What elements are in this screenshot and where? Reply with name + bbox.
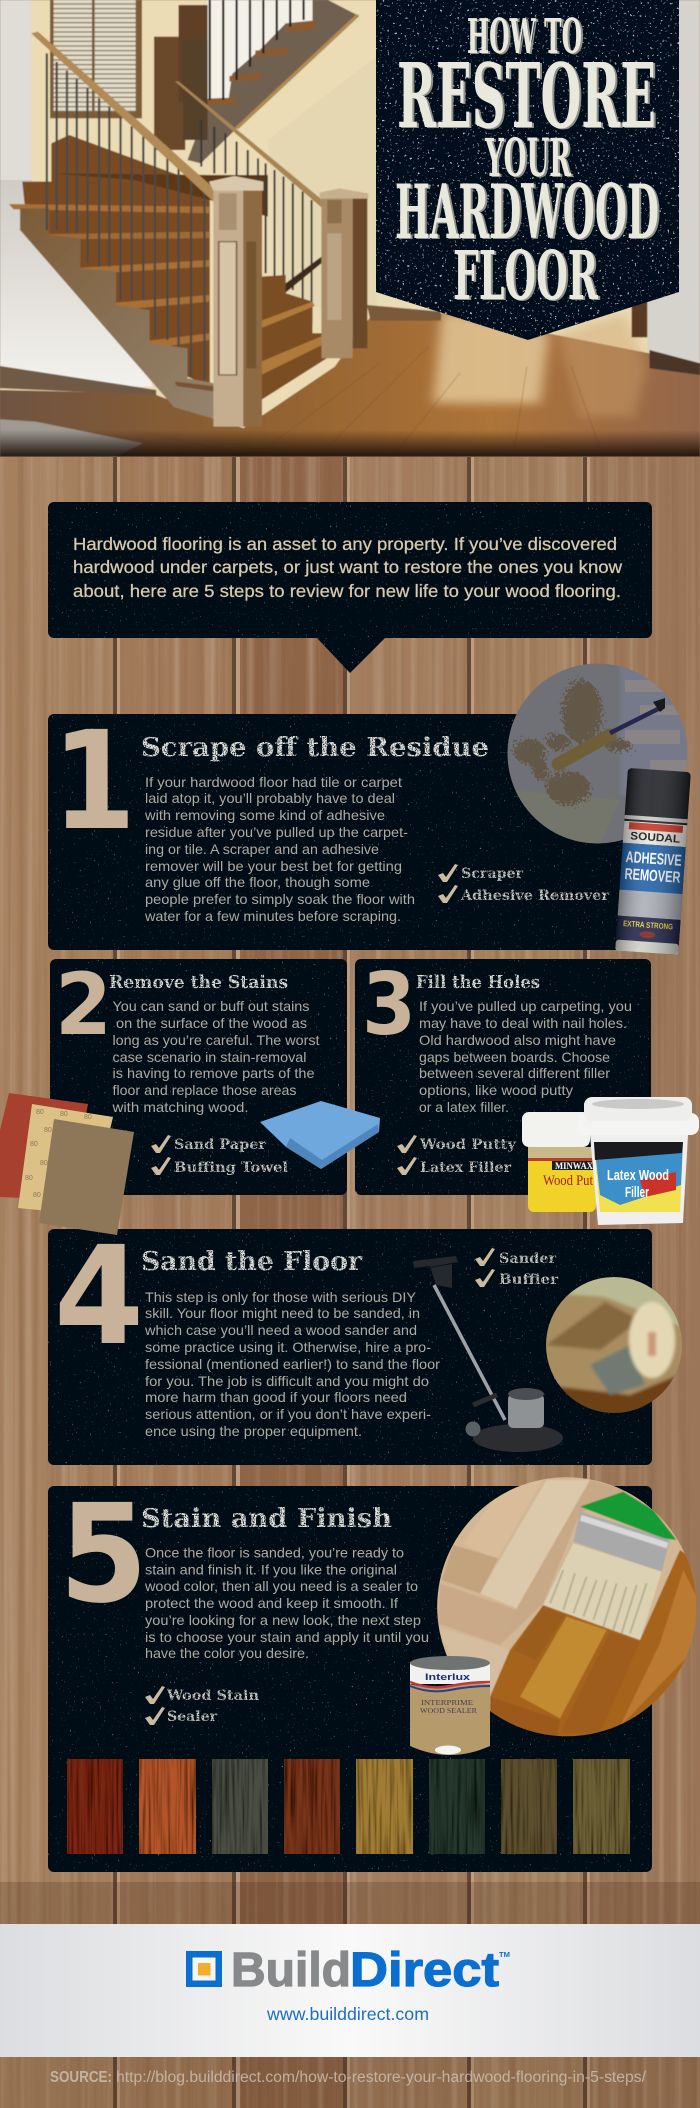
body: step 1: remover will be your best bet for getting [145, 859, 402, 874]
body: step 2: is having to remove parts of the [112, 1066, 314, 1081]
checklist: step 4: Sander [499, 1251, 557, 1267]
body: step 4: fessional (mentioned earlier!) to sand the floor [145, 1357, 440, 1372]
icon: wood sealer can [410, 1656, 490, 1755]
logo: BuildDirect: Build [231, 1944, 351, 1997]
icon: sandpaper sheets: 80 [60, 1111, 68, 1118]
body: step 3: or a latex filler. [419, 1100, 509, 1115]
icon: sandpaper sheets: 80 [33, 1192, 41, 1199]
checklist: step 5: Sealer [167, 1709, 218, 1725]
heading: step 4: Sand the Floor [141, 1247, 362, 1277]
checklist: step 3 [397, 1135, 517, 1176]
title [395, 9, 659, 315]
checklist: step 3: Wood Putty [419, 1137, 517, 1153]
heading: step 2: Remove the Stains [109, 972, 288, 993]
stain colour swatches [67, 1759, 630, 1854]
body: step 3: may have to deal with nail holes. [419, 1016, 627, 1031]
title banner [376, 0, 679, 340]
body: step 1: ing or tile. A scraper and an adhesive [145, 842, 379, 857]
body: step 4: more harm than good if your floors need [145, 1390, 407, 1405]
icon: sandpaper sheets: 80 [25, 1175, 33, 1182]
body: step 2: long as you’re careful. The worst [112, 1033, 320, 1048]
body: step 4: serious attention, or if you don’t have experi- [145, 1407, 431, 1422]
body: step 3: gaps between boards. Choose [419, 1050, 610, 1065]
checklist: step 2: Sand Paper [174, 1137, 267, 1153]
checklist: step 4: Buffier [499, 1272, 559, 1288]
intro text [73, 534, 622, 601]
body: step 1: any glue off the floor, though some [145, 875, 370, 890]
logo: BuildDirect: TM [499, 1952, 510, 1959]
icon: adhesive remover can: SOUDAL [630, 830, 681, 846]
icon: wood sealer can: WOOD SEALER [420, 1706, 477, 1715]
icon: sandpaper sheets: 80 [40, 1160, 48, 1167]
icon: sandpaper sheets: 80 [30, 1141, 38, 1148]
body: step 1: If your hardwood floor had tile or carpet [145, 775, 402, 790]
body: step 2 [111, 999, 320, 1115]
heading: step 1: Scrape off the Residue [141, 733, 489, 763]
icon: sandpaper sheets: 80 [36, 1109, 44, 1116]
body: step 5: you’re looking for a new look, the next step [145, 1613, 421, 1628]
icon: adhesive remover can [615, 768, 691, 955]
body: step 3: options, like wood putty [419, 1083, 573, 1098]
body: step 4 [144, 1290, 440, 1439]
body: step 5 [144, 1546, 429, 1661]
body: step 5: stain and finish it. If you like the original [145, 1562, 397, 1578]
body: step 4: This step is only for those with serious DIY [145, 1290, 416, 1305]
body: step 2: floor and replace those areas [112, 1083, 297, 1098]
body: step 4: for you. The job is difficult and you might do [145, 1374, 429, 1389]
checklist: step 2 [151, 1135, 288, 1176]
website link: www.builddirect.com [266, 2004, 429, 2024]
body: step 4: skill. Your floor might need to be sanded, in [145, 1306, 420, 1321]
checklist: step 1 [438, 864, 610, 904]
step number 1: 1 [52, 703, 136, 861]
body: step 2: with matching wood. [111, 1100, 249, 1115]
body: step 3: between several different filler [419, 1066, 611, 1081]
icon: latex wood filler tub [577, 1097, 699, 1225]
icon: latex wood filler tub: Filler [625, 1184, 649, 1201]
icon: latex wood filler tub: Latex Wood [607, 1167, 669, 1184]
title: HOW TO [467, 9, 582, 65]
checklist: step 5 [145, 1686, 259, 1725]
intro panel [48, 502, 652, 673]
title: YOUR [484, 128, 571, 189]
body: step 3: Old hardwood also might have [419, 1033, 616, 1048]
body: step 4: ence using the proper equipment. [145, 1424, 362, 1439]
icon: sandpaper sheets [0, 1093, 134, 1235]
body: step 1: with removing some kind of adhesive [144, 808, 385, 823]
checklist: step 4 [475, 1248, 559, 1288]
checklist: step 2: Buffing Towel [174, 1160, 288, 1176]
body: step 5: wood color, then all you need is a sealer to [144, 1579, 418, 1594]
body: step 2: on the surface of the wood as [116, 1016, 307, 1031]
hero photo: staircase and hardwood floor [0, 0, 700, 457]
heading: step 3: Fill the Holes [416, 972, 540, 993]
body: step 1: water for a few minutes before scraping. [144, 909, 401, 924]
body: step 4: some practice using it. Otherwise, hire a pro- [145, 1340, 431, 1355]
checklist: step 3: Latex Filler [420, 1160, 512, 1176]
step number 4: 4 [54, 1218, 144, 1376]
body: step 1 [144, 775, 415, 924]
heading: step 5: Stain and Finish [141, 1504, 392, 1534]
panel: step 5 [48, 1476, 652, 1872]
icon: blue buffing towel [260, 1101, 380, 1169]
footer band [0, 1924, 700, 2057]
body: step 3 [419, 999, 632, 1115]
step number 3: 3 [362, 955, 416, 1055]
checklist: step 1: Scraper [461, 866, 524, 882]
step number 5: 5 [59, 1476, 148, 1634]
icon: adhesive remover can: EXTRA STRONG [623, 919, 673, 931]
source line: SOURCE: [50, 2069, 112, 2086]
icon: sandpaper sheets: 80 [44, 1127, 52, 1134]
panel: step 3 [355, 955, 651, 1195]
icon: wood putty tub: MINWAX [555, 1161, 593, 1171]
body: step 1: laid atop it, you’ll probably have to deal [145, 791, 395, 806]
logo: BuildDirect: Direct [350, 1944, 499, 1997]
intro text: about, here are 5 steps to review for new life to your wood flooring. [73, 581, 621, 601]
icon: wood putty tub [522, 1112, 596, 1212]
step number 2: 2 [55, 955, 112, 1055]
logo: BuildDirect [186, 1944, 510, 1997]
source line: http://blog.builddirect.com/how-to-restore-your-hardwood-flooring-in-5-steps/ [116, 2069, 647, 2086]
wood plank background [0, 457, 700, 2108]
panel: step 1 [48, 703, 652, 950]
icon: sandpaper sheets: 80 [84, 1114, 92, 1121]
body: step 5: is to choose your stain and apply it until you [145, 1630, 429, 1645]
body: step 2: case scenario in stain-removal [112, 1050, 306, 1065]
body: step 3: If you’ve pulled up carpeting, you [419, 999, 632, 1014]
body: step 1: residue after you’ve pulled up the carpet- [145, 825, 408, 840]
checklist: step 5: Wood Stain [166, 1688, 259, 1704]
icon: wood sealer can: INTERPRIME [421, 1698, 473, 1707]
icon: wood sealer can: Interlux [425, 1672, 470, 1682]
intro text: Hardwood flooring is an asset to any property. If you’ve discovered [73, 534, 617, 554]
body: step 1: people prefer to simply soak the floor with [145, 892, 415, 907]
icon: floor buffer machine [413, 1256, 563, 1452]
panel: step 4 [48, 1218, 652, 1465]
panel: step 2 [50, 955, 347, 1195]
photo: scraper on residue [508, 664, 688, 844]
photo: drum sander on floor [546, 1277, 682, 1413]
body: step 5: protect the wood and keep it smooth. If [145, 1596, 398, 1611]
icon: wood putty tub: Wood Put [543, 1173, 594, 1189]
body: step 5: Once the floor is sanded, you’re ready to [145, 1546, 404, 1560]
photo: brush staining parquet [433, 1473, 700, 1740]
body: step 4: which case you’ll need a wood sander and [144, 1323, 417, 1338]
body: step 5: have the color you desire. [145, 1646, 309, 1661]
intro text: hardwood under carpets, or just want to restore the ones you know [73, 557, 622, 577]
checklist: step 1: Adhesive Remover [460, 888, 610, 904]
body: step 2: You can sand or buff out stains [112, 999, 310, 1014]
